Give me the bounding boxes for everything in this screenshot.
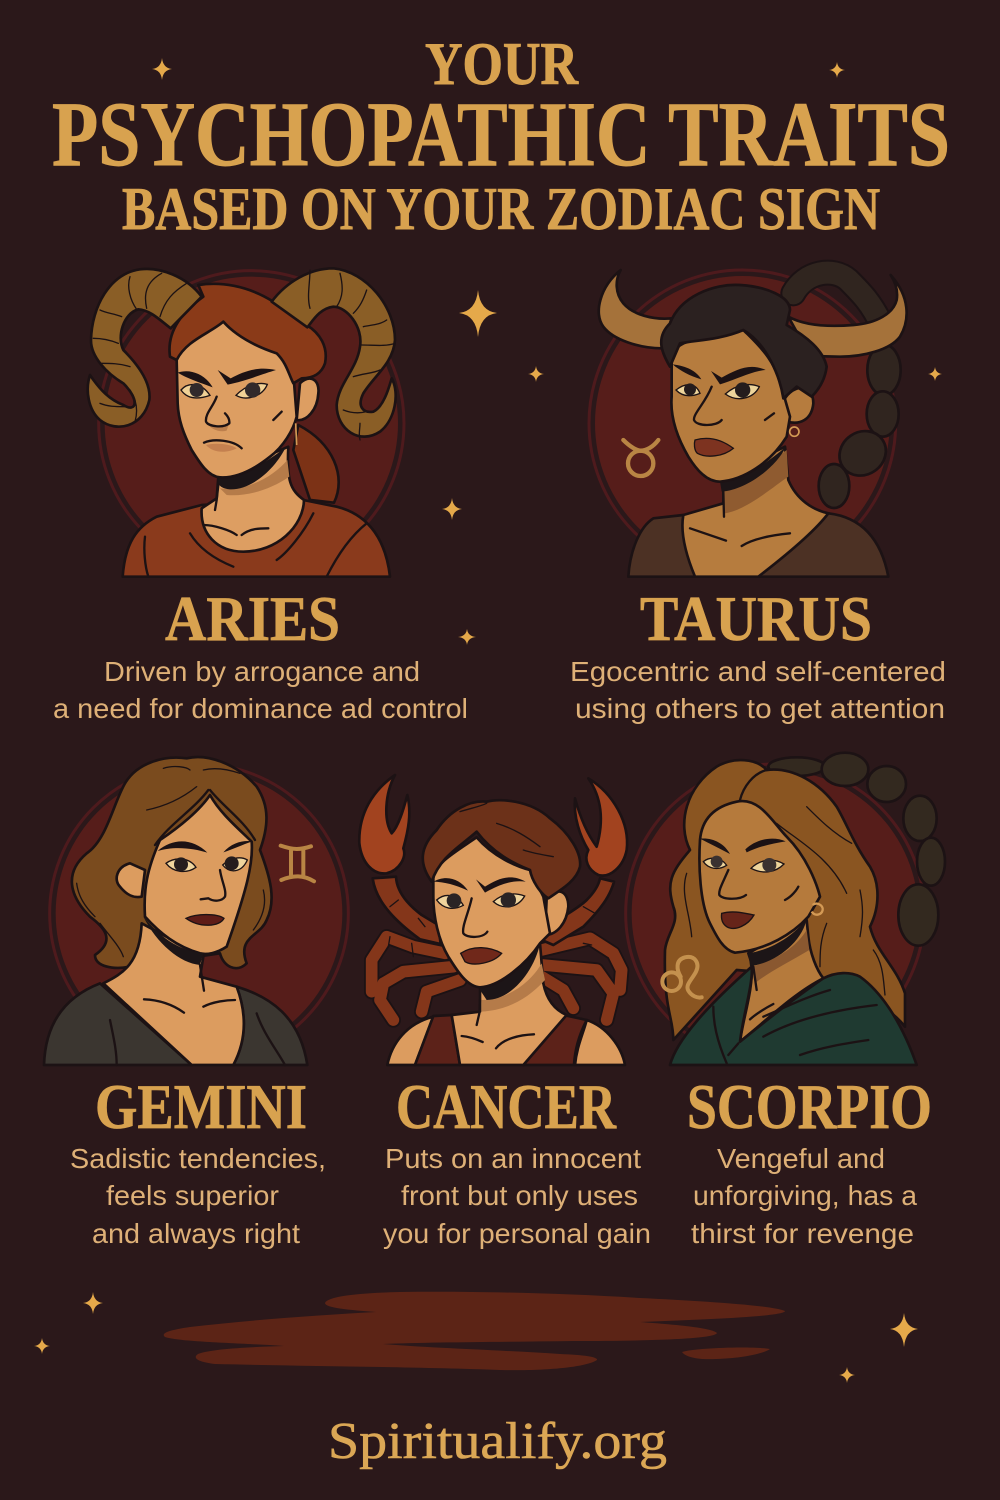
description: Gemini: Sadistic tendencies, <box>70 1143 326 1174</box>
title <box>52 31 950 242</box>
description: Aries <box>53 656 468 724</box>
description: Scorpio: Vengeful and <box>717 1143 885 1174</box>
illustration: Taurus woman with bull horns <box>589 270 907 577</box>
illustration: Gemini woman <box>44 757 348 1065</box>
name: Gemini: GEMINI <box>95 1072 307 1142</box>
description: Gemini: and always right <box>92 1218 300 1249</box>
description: Cancer: front but only uses <box>401 1180 638 1211</box>
description: Taurus: Egocentric and self-centered <box>570 656 946 687</box>
description: Cancer <box>383 1143 651 1249</box>
name: Aries: ARIES <box>165 584 340 654</box>
description: Taurus <box>570 656 946 724</box>
illustration: Aries woman with ram horns <box>88 268 404 577</box>
panel: Gemini <box>44 757 348 1249</box>
description: Aries: a need for dominance ad control <box>53 693 468 724</box>
icon: Leo symbol <box>662 957 702 998</box>
description: Gemini <box>70 1143 326 1249</box>
description: Gemini: feels superior <box>106 1180 279 1211</box>
blood splatter <box>164 1292 785 1370</box>
description: Aries: Driven by arrogance and <box>104 656 420 687</box>
description: Scorpio: thirst for revenge <box>691 1218 914 1249</box>
illustration: Cancer woman with crab claws <box>359 775 627 1065</box>
title: YOUR <box>425 31 579 97</box>
description: Scorpio <box>691 1143 917 1249</box>
name: Cancer: CANCER <box>396 1072 617 1142</box>
name: Taurus: TAURUS <box>640 584 872 654</box>
panel: Cancer <box>359 775 651 1249</box>
footer: website: Spiritualify.org <box>328 1413 667 1470</box>
description: Scorpio: unforgiving, has a <box>693 1180 917 1211</box>
icon: Taurus symbol <box>623 440 658 476</box>
name: Scorpio: SCORPIO <box>687 1072 932 1142</box>
panel: Taurus <box>570 270 946 724</box>
description: Cancer: Puts on an innocent <box>385 1143 641 1174</box>
icon: Gemini symbol <box>281 846 314 881</box>
panel: Aries <box>53 268 468 724</box>
description: Cancer: you for personal gain <box>383 1218 651 1249</box>
illustration: Scorpio woman with scorpion tail <box>626 753 945 1065</box>
panel: Scorpio <box>626 753 945 1249</box>
description: Taurus: using others to get attention <box>575 693 945 724</box>
